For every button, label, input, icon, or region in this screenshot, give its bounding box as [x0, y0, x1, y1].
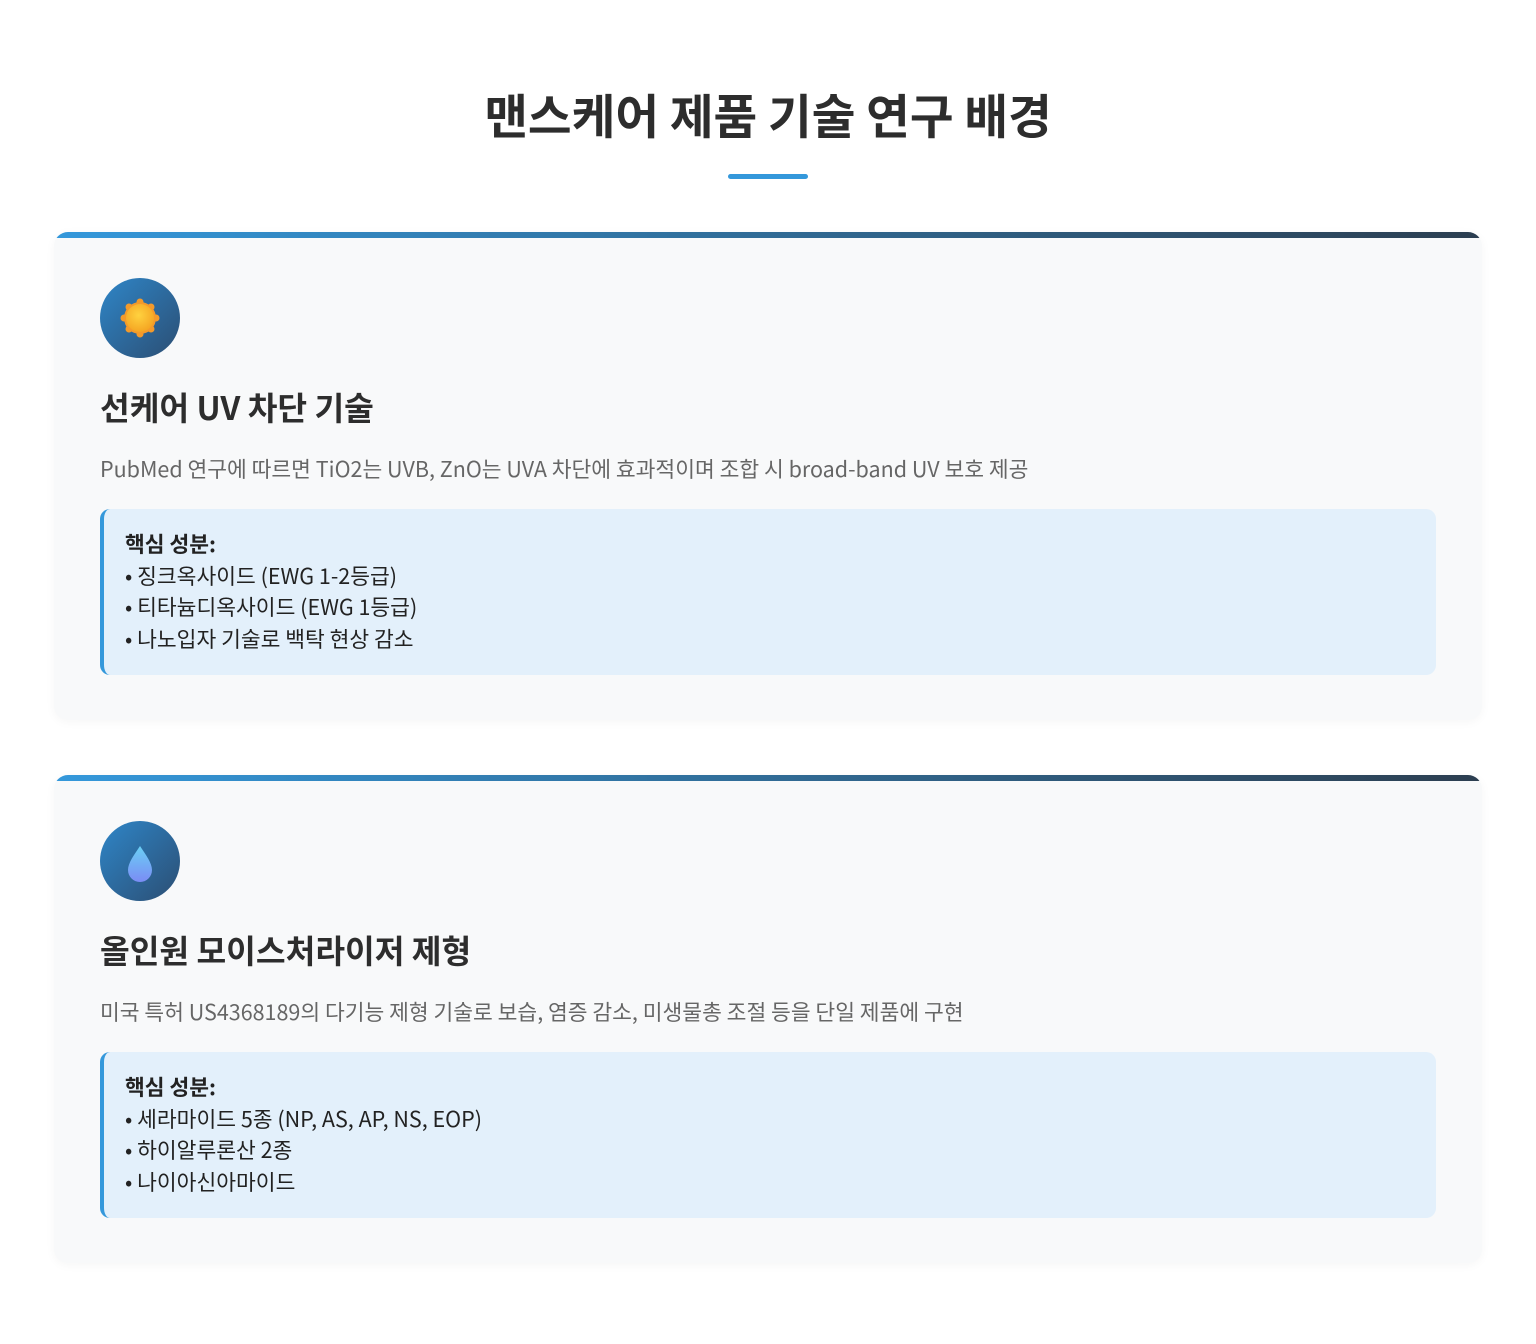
- key ingredients box: [100, 1052, 1436, 1218]
- heading: 선케어 UV 차단 기술: [100, 384, 374, 430]
- key ingredients box: • 하이알루론산 2종: [125, 1134, 292, 1165]
- panel: all-in-one moisturizer: [54, 775, 1482, 1263]
- key ingredients box: 핵심 성분:: [125, 1071, 216, 1102]
- key ingredients box: • 티타늄디옥사이드 (EWG 1등급): [125, 591, 417, 622]
- panel: sunscreen UV: [54, 232, 1482, 720]
- description: PubMed 연구에 따르면 TiO2는 UVB, ZnO는 UVA 차단에 효과적이며 조합 시 broad-band UV 보호 제공: [100, 453, 1028, 484]
- title underline: [728, 174, 808, 179]
- key ingredients box: 핵심 성분:: [125, 528, 216, 559]
- description: 미국 특허 US4368189의 다기능 제형 기술로 보습, 염증 감소, 미생물총 조절 등을 단일 제품에 구현: [100, 996, 964, 1027]
- heading: 올인원 모이스처라이저 제형: [100, 927, 471, 973]
- title: 맨스케어 제품 기술 연구 배경: [484, 79, 1052, 148]
- icon: water drop: [100, 821, 180, 901]
- key ingredients box: [100, 509, 1436, 675]
- icon: sun: [100, 278, 180, 358]
- key ingredients box: • 징크옥사이드 (EWG 1-2등급): [125, 560, 397, 590]
- key ingredients box: • 세라마이드 5종 (NP, AS, AP, NS, EOP): [125, 1102, 482, 1134]
- key ingredients box: • 나노입자 기술로 백탁 현상 감소: [125, 622, 414, 654]
- key ingredients box: • 나이아신아마이드: [125, 1166, 295, 1196]
